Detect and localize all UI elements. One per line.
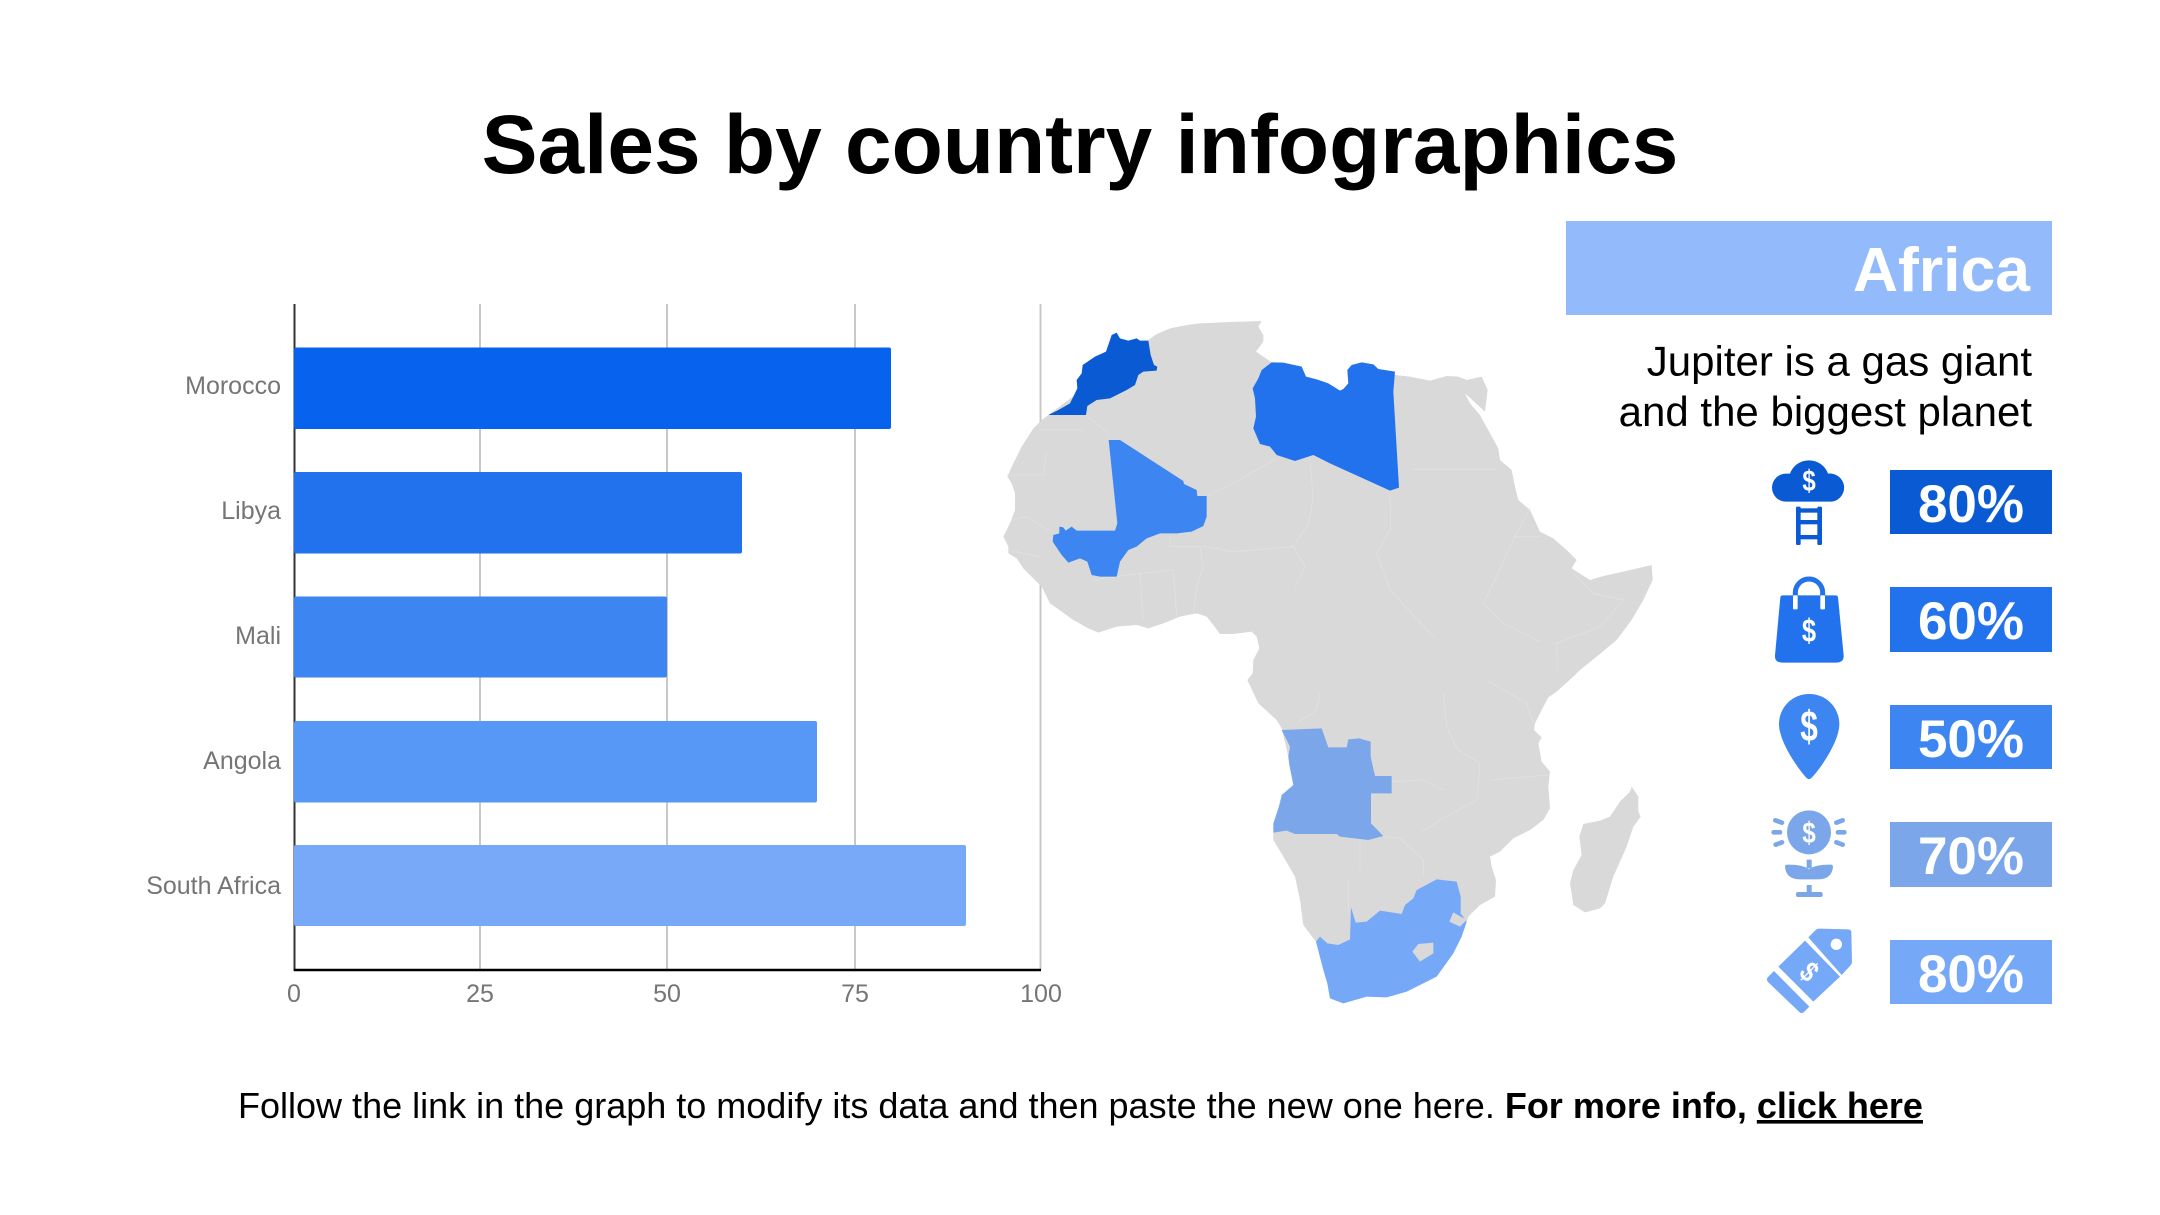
icon: price tag: $: [1793, 955, 1826, 988]
island: Madagascar: [1570, 787, 1641, 912]
axis tick labels: [287, 980, 1062, 1008]
icon: map pin: [1779, 694, 1839, 779]
continent: [1003, 321, 1653, 1003]
panel: Africa heading: Africa: [1853, 235, 2031, 305]
icon: price tag: [1767, 929, 1852, 1013]
category labels: Libya: [221, 497, 281, 525]
axis tick labels: 25: [466, 980, 494, 1008]
category labels: Angola: [203, 747, 281, 775]
icon: money plant: $: [1802, 815, 1816, 850]
percentage: 70%: [1890, 822, 2052, 887]
axis tick labels: 75: [841, 980, 869, 1008]
percentage: 80%: [1890, 940, 2052, 1004]
description text: Jupiter is a gas giant: [1647, 338, 2032, 384]
region: Mali: [1053, 440, 1207, 577]
bar: South Africa: [294, 845, 966, 926]
bar: Angola: [294, 721, 817, 802]
title: Sales by country infographics: [482, 97, 1678, 191]
axis tick labels: 100: [1020, 980, 1062, 1008]
icon: shopping bag: $: [1802, 614, 1816, 649]
category labels: South Africa: [146, 872, 281, 900]
axis tick labels: 0: [287, 980, 301, 1008]
footer note: Follow the link in the graph to modify its data and then paste the new one here. For more info, click here: [238, 1085, 1923, 1126]
percentage: 60%: 60%: [1918, 592, 2024, 651]
percentage: 50%: [1890, 705, 2052, 769]
percentage: 70%: 70%: [1918, 827, 2024, 886]
bar: Libya: [294, 472, 742, 554]
category labels: [146, 372, 281, 900]
region: Angola: [1273, 728, 1392, 840]
icon: money plant: [1774, 810, 1844, 897]
bar: Morocco: [294, 348, 891, 429]
percentage: 80%: 80%: [1918, 945, 2024, 1004]
region: Libya: [1253, 362, 1399, 491]
panel: Africa heading: [1566, 221, 2052, 315]
category labels: Mali: [235, 622, 281, 650]
region: Morocco: [1048, 333, 1157, 415]
icon: shopping bag: [1775, 579, 1844, 663]
region: South Africa: [1316, 879, 1467, 1003]
percentage: 60%: [1890, 587, 2052, 652]
axis tick labels: 50: [653, 980, 681, 1008]
description text: and the biggest planet: [1619, 388, 2032, 435]
percentage: 80%: [1890, 470, 2052, 534]
percentage: 80%: 80%: [1918, 475, 2024, 534]
map of Africa: [1003, 321, 1653, 1003]
percentage: 50%: 50%: [1918, 710, 2024, 769]
icon: cloud with ladder: [1772, 460, 1844, 545]
icon: cloud with ladder: $: [1802, 463, 1816, 498]
icon: map pin: $: [1800, 703, 1818, 752]
bar: Mali: [294, 596, 667, 678]
category labels: Morocco: [185, 372, 281, 400]
bar chart: [146, 304, 1062, 1008]
